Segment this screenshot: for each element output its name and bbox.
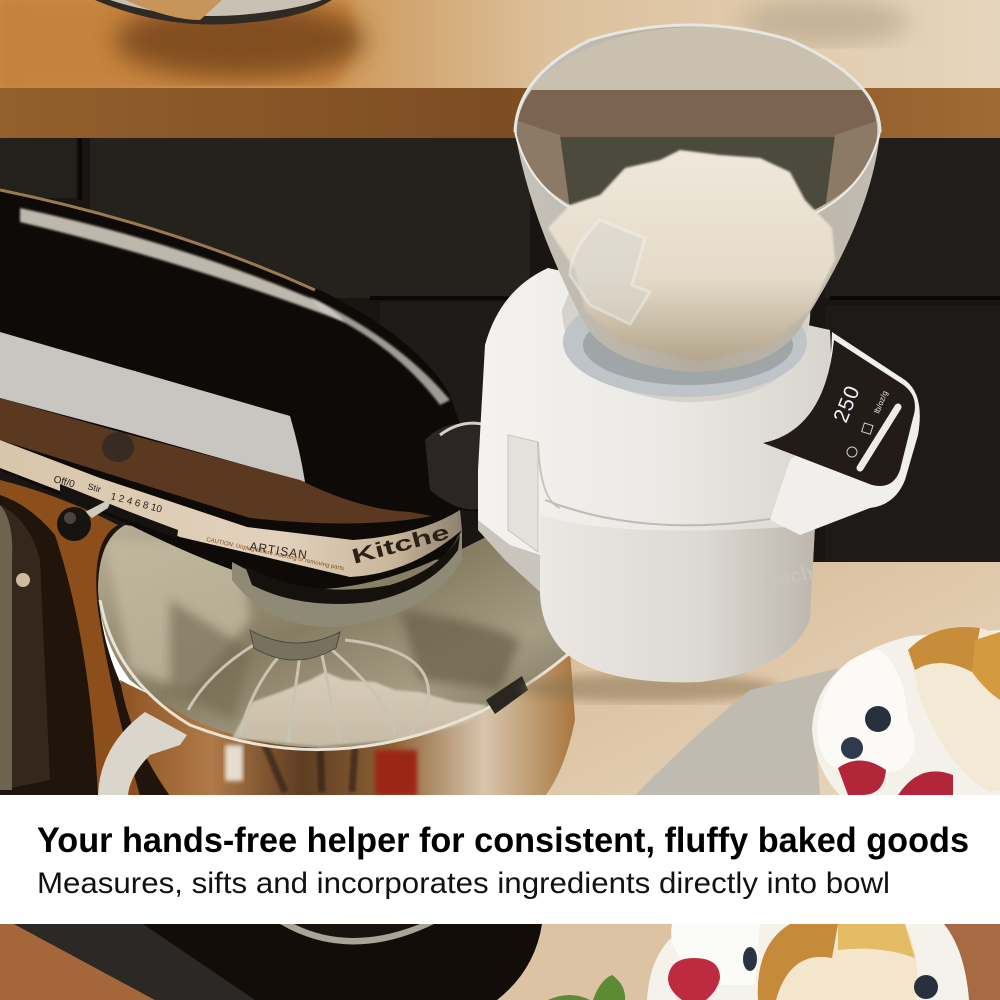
mixer trim strip with speed labels	[0, 440, 462, 577]
icon: tare	[862, 423, 873, 434]
touch buttons	[860, 407, 898, 468]
bottom strip: wood counter	[0, 924, 1000, 1000]
mixer trim strip with speed labels: CAUTION: Unplug before inserting or removing parts	[206, 537, 344, 572]
mixer head ring	[232, 530, 462, 627]
raspberry	[668, 958, 720, 1000]
bowl handle	[98, 712, 187, 795]
plate at the top	[95, 0, 332, 24]
bottom strip: dessert plate	[548, 924, 969, 1000]
mixer trim strip with speed labels: 1 2 4 6 8 10	[109, 491, 164, 516]
dessert plate	[812, 627, 1000, 795]
scale control panel	[763, 332, 920, 535]
white caption band	[0, 795, 1000, 924]
sifter collar	[562, 287, 810, 402]
hopper handle	[570, 220, 650, 324]
scale sifter body	[478, 268, 835, 682]
whisk	[188, 630, 429, 742]
background: upper wooden counter	[0, 0, 1000, 138]
mixer trim strip with speed labels: ARTISAN	[249, 539, 309, 562]
flour in hopper	[548, 150, 835, 362]
blueberries	[865, 706, 891, 732]
sifter shadow	[520, 674, 780, 702]
background: lower counter	[540, 562, 1000, 796]
scale control panel: lb/oz/g	[873, 390, 890, 415]
mixer base and bowl exterior	[0, 480, 575, 796]
icon: power	[847, 447, 857, 457]
bowl interior	[98, 525, 572, 748]
mixer trim strip with speed labels: Kitche	[349, 521, 452, 569]
headline: Your hands-free helper for consistent, fluffy baked goods	[37, 821, 969, 860]
hopper bowl	[515, 25, 880, 372]
bowl rim	[100, 600, 575, 750]
speed control knob	[57, 498, 112, 541]
mixer head	[0, 190, 485, 590]
sifter clip on bowl	[486, 676, 528, 714]
cake	[758, 924, 918, 1000]
flour in mixer bowl	[232, 672, 487, 746]
whipped cream	[818, 650, 915, 774]
background: dark cabinet	[0, 138, 1000, 563]
mixer trim strip with speed labels: Stir	[86, 481, 102, 494]
subheading: Measures, sifts and incorporates ingredients directly into bowl	[37, 867, 890, 900]
raspberries	[838, 760, 886, 795]
mint	[548, 975, 625, 1000]
mixer trim strip with speed labels: Off/0	[52, 474, 76, 491]
scale sifter body: Kitch	[762, 561, 816, 595]
cake slice	[908, 627, 1000, 792]
blueberries	[743, 947, 757, 971]
bottom strip: mixer base	[14, 924, 542, 1000]
napkin	[635, 668, 838, 795]
scale readout: 250	[829, 382, 865, 426]
